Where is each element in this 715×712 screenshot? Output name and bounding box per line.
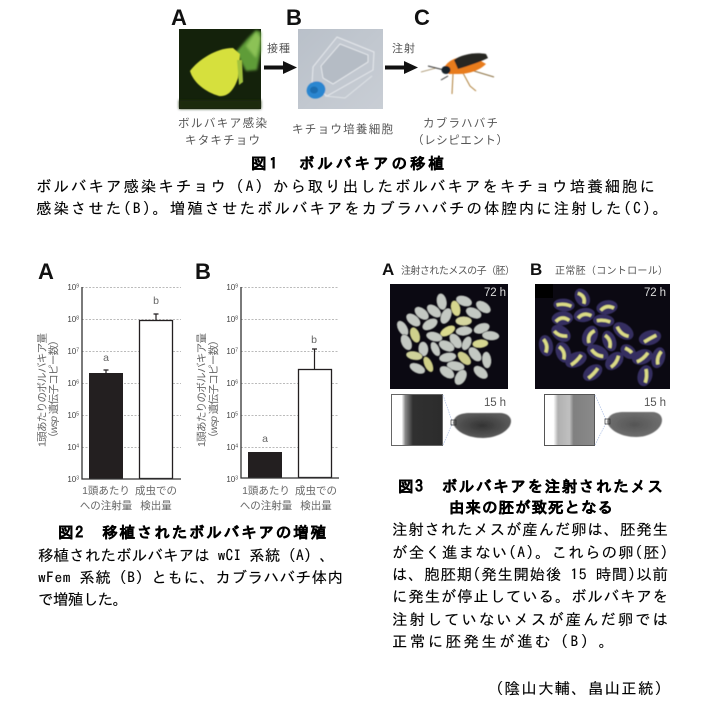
y tick labels: 3 bbox=[235, 476, 238, 482]
x labels: 成虫での bbox=[295, 485, 337, 497]
x labels: への注射量 bbox=[80, 499, 133, 512]
y tick labels: 5 bbox=[76, 412, 79, 418]
caption: recipient: （レシピエント） bbox=[412, 134, 508, 147]
panel: figure 2 chart B bbox=[195, 259, 339, 512]
label B: B bbox=[195, 259, 211, 284]
y tick labels: 10 bbox=[226, 379, 235, 388]
label B: B bbox=[286, 5, 302, 30]
panel: figure 3 embryo photos bbox=[382, 260, 670, 446]
bar: injected amount bbox=[90, 370, 122, 478]
axes bbox=[241, 287, 339, 478]
text: figure 3 description bbox=[392, 521, 668, 649]
y tick labels: 10 bbox=[226, 475, 235, 484]
photo: sawfly beetle bbox=[421, 53, 494, 94]
y tick labels: 10 bbox=[67, 411, 76, 420]
y tick labels: 9 bbox=[76, 284, 79, 290]
time label: 72 h bbox=[484, 287, 506, 299]
y tick labels bbox=[67, 283, 79, 484]
significance letters: a bbox=[103, 352, 109, 364]
y axis title bbox=[36, 332, 60, 447]
significance letters: b bbox=[311, 334, 317, 346]
y tick labels: 10 bbox=[67, 315, 76, 324]
caption: butterfly bbox=[178, 116, 268, 147]
label B: B bbox=[530, 260, 542, 279]
y tick labels: 10 bbox=[67, 443, 76, 452]
arrow B to C bbox=[385, 61, 418, 74]
y tick labels: 10 bbox=[226, 315, 235, 324]
y tick labels: 8 bbox=[235, 316, 238, 322]
x labels: 1頭あたり bbox=[242, 485, 290, 497]
text: figure 2 description: wFem 系統（B）ともに、カブラハバチ体内 bbox=[38, 569, 343, 585]
caption: recipient: カブラハバチ bbox=[423, 116, 498, 130]
title: figure 2: 図2 移植されたボルバキアの増殖 bbox=[58, 524, 326, 540]
y tick labels: 10 bbox=[67, 283, 76, 292]
label A: A bbox=[171, 5, 187, 30]
text: figure 2 description: で増殖した。 bbox=[38, 591, 128, 607]
significance letters: a bbox=[262, 433, 268, 445]
y tick labels bbox=[226, 283, 238, 484]
text: figure 3 description: 正常に胚発生が進む（B）。 bbox=[392, 633, 614, 649]
text: figure 1 description: ボルバキア感染キチョウ（A）から取り出したボルバキアをキチョウ培養細胞に bbox=[36, 178, 655, 194]
text: figure 3 description: に発生が停止している。ボルバキアを bbox=[392, 588, 668, 604]
inset: normal embryo 15 h: 15 h bbox=[644, 397, 666, 409]
y tick labels: 7 bbox=[76, 348, 79, 354]
heading: control: 正常胚（コントロール） bbox=[555, 264, 668, 277]
text: figure 3 description: 注射されたメスが産んだ卵は、胚発生 bbox=[392, 521, 668, 537]
significance letters: b bbox=[153, 295, 159, 307]
photo: yellow butterfly bbox=[179, 29, 261, 109]
y tick labels: 8 bbox=[76, 316, 79, 322]
photo: arrested eggs 72 h bbox=[390, 284, 508, 389]
caption: recipient bbox=[412, 116, 508, 147]
heading: injected offspring: 注射されたメスの子（胚） bbox=[401, 264, 515, 277]
gridlines bbox=[82, 288, 181, 448]
gridlines bbox=[241, 288, 339, 448]
caption: butterfly: キタキチョウ bbox=[185, 134, 260, 147]
photo: culture flask bbox=[298, 29, 383, 109]
caption: cell culture: キチョウ培養細胞 bbox=[292, 122, 394, 136]
text: figure 3 description: は、胞胚期(発生開始後 15 時間)以前 bbox=[392, 566, 668, 582]
arrow label: injection: 注射 bbox=[392, 41, 415, 55]
text: figure 1 description bbox=[36, 178, 668, 216]
title: figure 1: 図1 ボルバキアの移植 bbox=[251, 155, 444, 171]
label A: A bbox=[38, 259, 54, 284]
x labels: 成虫での bbox=[135, 485, 177, 497]
time label: 72 h bbox=[644, 287, 666, 299]
inset: normal embryo 15 h bbox=[544, 394, 666, 446]
y tick labels: 7 bbox=[235, 348, 238, 354]
significance letters bbox=[103, 295, 159, 364]
y tick labels: 5 bbox=[235, 412, 238, 418]
x labels: への注射量 bbox=[240, 499, 293, 512]
y axis title bbox=[196, 332, 220, 447]
y tick labels: 10 bbox=[67, 379, 76, 388]
text: figure 2 description: 移植されたボルバキアは wCI 系統（A）、 bbox=[38, 547, 335, 563]
x labels: 検出量 bbox=[300, 499, 332, 512]
y tick labels: 4 bbox=[76, 444, 79, 450]
panel: figure 1 transplant diagram bbox=[171, 5, 508, 147]
y tick labels: 6 bbox=[76, 380, 79, 386]
y tick labels: 4 bbox=[235, 444, 238, 450]
arrow label: inoculation: 接種 bbox=[267, 41, 290, 55]
y axis title: 1頭あたりのボルバキア量 bbox=[196, 332, 208, 447]
y tick labels: 10 bbox=[226, 411, 235, 420]
y tick labels: 10 bbox=[226, 347, 235, 356]
y axis title: （wsp 遺伝子コピー数） bbox=[47, 335, 60, 443]
bar: detected amount bbox=[298, 349, 332, 478]
bar: detected amount bbox=[140, 314, 172, 478]
y axis title: 1頭あたりのボルバキア量 bbox=[36, 332, 48, 447]
x labels: 検出量 bbox=[140, 499, 172, 512]
text: figure 2 description bbox=[38, 547, 343, 607]
x labels bbox=[80, 485, 177, 512]
y tick labels: 9 bbox=[235, 284, 238, 290]
arrow A to B bbox=[264, 61, 297, 74]
text: authors: （陰山大輔、畠山正統） bbox=[488, 680, 670, 696]
significance letters bbox=[262, 334, 317, 445]
photo: developing eggs 72 h bbox=[535, 284, 670, 389]
caption: butterfly: ボルバキア感染 bbox=[178, 116, 268, 130]
inset: arrested embryo 15 h bbox=[392, 394, 511, 446]
title: figure 3 bbox=[398, 478, 663, 515]
y tick labels: 10 bbox=[67, 475, 76, 484]
label A: A bbox=[382, 260, 394, 279]
inset: arrested embryo 15 h: 15 h bbox=[484, 397, 506, 409]
y tick labels: 10 bbox=[226, 443, 235, 452]
y tick labels: 6 bbox=[235, 380, 238, 386]
x labels: 1頭あたり bbox=[82, 485, 130, 497]
text: figure 3 description: 注射していないメスが産んだ卵では bbox=[392, 611, 668, 627]
y tick labels: 10 bbox=[67, 347, 76, 356]
x labels bbox=[240, 485, 337, 512]
title: figure 3: 由来の胚が致死となる bbox=[449, 499, 613, 515]
bar: injected amount bbox=[248, 452, 282, 478]
label C: C bbox=[414, 5, 430, 30]
y tick labels: 10 bbox=[226, 283, 235, 292]
text: figure 1 description: 感染させた(B)。増殖させたボルバキアをカブラハバチの体腔内に注射した(C)。 bbox=[36, 200, 668, 216]
axes bbox=[82, 287, 181, 479]
panel: figure 2 chart A bbox=[36, 259, 181, 512]
y axis title: （wsp 遺伝子コピー数） bbox=[207, 335, 220, 443]
title: figure 3: 図3 ボルバキアを注射されたメス bbox=[398, 478, 663, 494]
y tick labels: 3 bbox=[76, 476, 79, 482]
text: figure 3 description: が全く進まない(A)。これらの卵(胚) bbox=[392, 544, 668, 560]
